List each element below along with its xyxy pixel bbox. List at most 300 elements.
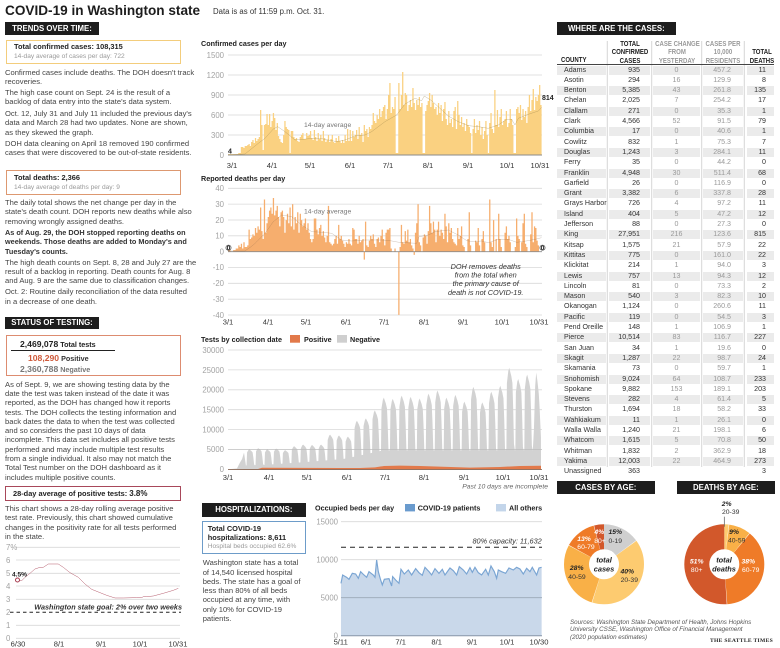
text: testing data explanation: performed and may include multiple test results: [5, 445, 164, 454]
heading: deaths by age: DEATHS BY AGE:: [693, 483, 759, 492]
text: weekend reporting note: As of Aug. 29, the DOH stopped reporting deaths on: [5, 228, 186, 237]
table rows: 106.9: [713, 323, 731, 331]
chart: tests by collection date: 5/1: [302, 473, 312, 482]
table rows: 11: [759, 66, 766, 74]
table rows: 0: [762, 158, 766, 166]
annotation: DOH removes deaths: from the total when: [455, 270, 517, 280]
table header: FROM: [668, 47, 686, 56]
chart: tests by collection date: 25000: [202, 366, 225, 375]
text: hospital capacity: beds. The state has a goal of: [203, 577, 300, 586]
heading: where are the cases: [557, 22, 676, 35]
heading: status of testing: [5, 317, 99, 329]
table rows: 40.6: [717, 127, 731, 135]
text: daily total note: [5, 198, 192, 226]
table rows: 3: [762, 313, 766, 321]
table rows: 1,240: [622, 426, 640, 434]
table rows: 1: [762, 364, 766, 372]
chart: occupied beds per day: 5/11: [334, 638, 348, 646]
text: hospital capacity: [202, 558, 300, 623]
chart: reported deaths per day: Reported deaths per day: [201, 174, 285, 183]
stat: 28-day average: 28-day average of positive tests: 3.8%: [13, 489, 147, 498]
table rows: Ferry: [564, 158, 581, 166]
chart: confirmed cases per day: 3/1: [227, 161, 237, 170]
table rows: 22: [758, 241, 766, 249]
table rows: 148: [628, 323, 640, 331]
table rows: 50: [758, 436, 766, 444]
table rows: 22: [673, 457, 680, 465]
chart: confirmed cases per day: 9/1: [463, 161, 473, 170]
annotation: DOH removes deaths: DOH removes deaths: [451, 262, 521, 271]
table header: TOTAL: [752, 47, 771, 56]
heading: deaths by age: [677, 481, 775, 494]
table rows: 233: [754, 374, 766, 382]
chart: reported deaths per day: [201, 174, 549, 326]
line: 80% capacity: 80% capacity: 11,632: [472, 537, 542, 546]
table rows: 16: [673, 76, 680, 84]
text: updates note: as they skewed the graph.: [5, 128, 94, 137]
text: sources: [570, 618, 752, 641]
table rows: 129.9: [713, 76, 731, 84]
table rows: 189.1: [713, 385, 731, 393]
table rows: 832: [628, 138, 640, 146]
chart: occupied beds per day: 9/1: [467, 638, 477, 646]
table rows: 22: [758, 251, 766, 259]
chart: cases by age donut: 4%: [593, 529, 604, 536]
table rows: 1,243: [622, 148, 640, 156]
table rows: 227: [754, 333, 766, 341]
chart: tests by collection date: 10/1: [496, 473, 510, 482]
table rows: Mason: [564, 292, 585, 300]
chart: cases by age donut: 40%: [619, 568, 634, 576]
table rows: Skagit: [564, 354, 584, 362]
table rows: 35.3: [717, 107, 731, 115]
chart: reported deaths per day: 30: [215, 200, 225, 209]
text: weekend reporting note: Tuesday's counts.: [5, 247, 68, 256]
table rows: 0: [675, 179, 678, 187]
chart: deaths by age donut: total: [716, 556, 733, 564]
panel: status of testing: [5, 317, 181, 541]
table rows: 21: [673, 241, 680, 249]
table header: [557, 39, 774, 65]
table rows: 10,514: [618, 333, 640, 341]
chart: confirmed cases per day: 10/31: [530, 161, 550, 170]
legend: positive: [290, 335, 332, 344]
table rows: 21: [673, 426, 680, 434]
text: testing data explanation: from a single individual. It also may not match the: [5, 454, 171, 463]
table rows: 8: [762, 76, 766, 84]
table rows: Spokane: [564, 385, 592, 393]
table rows: 4,566: [622, 117, 640, 125]
table rows: 9,024: [622, 374, 640, 382]
legend: COVID-19 patients: COVID-19 patients: [418, 504, 480, 512]
table rows: 757: [628, 272, 640, 280]
chart: 28-day average of positive tests: 5: [6, 569, 11, 578]
table rows: 0: [675, 251, 678, 259]
table header: RESIDENTS: [705, 56, 740, 65]
text: hospital capacity: of 14,540 licensed hospital: [203, 568, 293, 577]
chart: occupied beds per day: 15000: [316, 518, 339, 527]
callout: total confirmed cases: [6, 40, 180, 64]
text: reconciliation note: Oct. 2: Routine daily reconciliation of the data resulted: [5, 287, 187, 296]
heading: where are the cases: WHERE ARE THE CASES:: [568, 24, 665, 33]
chart: confirmed cases per day: 5/1: [305, 161, 315, 170]
chart: occupied beds per day: 0: [334, 632, 339, 641]
table rows: 362.9: [713, 447, 731, 455]
table rows: Franklin: [564, 169, 589, 177]
text: confirmed cases note: Confirmed cases include deaths. The DOH doesn't track: [5, 68, 194, 77]
text: hospital capacity: only 10% for COVID-19: [203, 605, 282, 614]
table rows: 18: [673, 405, 680, 413]
text: testing data explanation: Total Test number on the DOH dashboard as it: [5, 463, 161, 472]
chart: occupied beds per day: 7/1: [395, 638, 406, 646]
chart: cases by age donut: total: [596, 556, 613, 564]
chart: confirmed cases per day: 10/1: [500, 161, 514, 170]
chart: deaths by age donut: deaths: [712, 564, 736, 574]
chart: tests by collection date: 9/1: [459, 473, 469, 482]
chart: reported deaths per day: 5/1: [301, 318, 311, 326]
table rows: Clark: [564, 117, 581, 125]
table rows: Pacific: [564, 313, 585, 321]
chart: reported deaths per day: 0: [227, 245, 231, 252]
table rows: Kitsap: [564, 241, 584, 249]
table rows: 58.2: [717, 405, 731, 413]
table rows: 726: [628, 199, 640, 207]
text: testing data explanation: tests. The DOH collects the testing information and: [5, 408, 176, 417]
chart: tests by collection date: 20000: [202, 386, 225, 394]
chart: reported deaths per day: 9/1: [458, 318, 468, 326]
chart: reported deaths per day: 3/1: [223, 318, 233, 326]
chart: 28-day average of positive tests: 7%: [6, 543, 17, 552]
annotation: DOH removes deaths: the primary cause of: [453, 279, 520, 288]
chart: reported deaths per day: -40: [213, 311, 225, 320]
table header: COUNTY: [561, 55, 587, 64]
table rows: Asotin: [564, 76, 584, 84]
table rows: 119: [629, 313, 640, 321]
heading: hospitalizations: HOSPITALIZATIONS:: [215, 505, 292, 514]
chart: confirmed cases per day: 1200: [207, 71, 225, 80]
table rows: 0: [675, 107, 678, 115]
table rows: 404: [628, 210, 640, 218]
chart: reported deaths per day: 20: [215, 216, 225, 225]
chart: tests by collection date: 4/1: [264, 473, 274, 482]
chart: cases by age donut: 80+: [594, 538, 606, 545]
table rows: 83: [673, 333, 680, 341]
table rows: 13: [673, 272, 680, 280]
table rows: Island: [564, 210, 583, 218]
legend: all others: All others: [509, 504, 542, 512]
heading: hospitalizations: [202, 503, 306, 517]
table: cases by county: [557, 39, 774, 65]
chart: confirmed cases per day: 6/1: [345, 161, 355, 170]
callout: total deaths: [6, 170, 180, 194]
table rows: 3: [762, 467, 766, 475]
table rows: 7: [675, 96, 678, 104]
subtitle: data date: Data is as of 11:59 p.m. Oct. 31.: [213, 7, 324, 16]
chart: tests by collection date: 0: [220, 465, 225, 474]
table rows: 12: [758, 210, 766, 218]
table rows: 88: [632, 220, 640, 228]
text: sources: University CSSE, Washington Office of Financial Management: [570, 626, 743, 633]
table header: CASES PER: [705, 39, 740, 48]
table rows: 1,575: [622, 241, 640, 249]
table rows: 1: [675, 344, 678, 352]
table rows: 1: [762, 127, 766, 135]
table rows: 24: [758, 354, 766, 362]
chart: confirmed cases per day: 814: [542, 95, 554, 102]
chart: confirmed cases per day: 14-day average: [304, 122, 351, 129]
chart: reported deaths per day: -20: [213, 279, 225, 288]
chart: confirmed cases per day: 900: [211, 91, 225, 100]
text: 28-day rate explanation: changes in the positivity rate for all tests performed: [5, 523, 176, 532]
text: 28-day rate explanation: in the state.: [5, 532, 44, 541]
callout: 28-day average of positive tests: [5, 486, 180, 501]
table rows: 1: [675, 416, 678, 424]
series: negative tests base: [243, 450, 541, 469]
table rows: Lincoln: [564, 282, 586, 290]
table rows: 30: [673, 169, 680, 177]
text: testing data explanation: reported, as the DOH has changed how it reports: [5, 398, 170, 407]
table rows: 116.9: [714, 179, 731, 187]
chart: tests by collection date: 5000: [207, 445, 225, 454]
table rows: 75.3: [717, 138, 731, 146]
text: hospital capacity: less than 80% of all beds: [203, 586, 287, 595]
chart: occupied beds per day: [315, 504, 549, 646]
table rows: 216: [671, 230, 682, 238]
table rows: 11: [633, 416, 640, 424]
text: testing data explanation: As of Sept. 9, we are showing testing data by the: [5, 380, 170, 389]
chart: 28-day average of positive tests: 3: [6, 595, 10, 604]
chart: tests by collection date: 6/1: [342, 473, 352, 482]
stat: positive tests: 108,290 Positive: [28, 353, 89, 363]
table rows: 28: [758, 189, 766, 197]
table rows: 7: [762, 138, 766, 146]
table rows: 254.2: [713, 96, 731, 104]
chart: deaths by age donut: 20-39: [722, 509, 740, 516]
table rows: 57.9: [717, 241, 731, 249]
table rows: 17: [758, 96, 766, 104]
chart: occupied beds per day: 10000: [316, 556, 339, 565]
text: hospital capacity: patients.: [203, 614, 231, 623]
table rows: 91.5: [717, 117, 731, 125]
table rows: 44.2: [717, 158, 731, 166]
text: data cleaning note: [5, 139, 192, 157]
text: testing data explanation: back dates the data to when the test was collected: [5, 417, 175, 426]
table rows: Whatcom: [564, 436, 594, 444]
table rows: 5: [675, 436, 678, 444]
table rows: Benton: [564, 86, 586, 94]
table rows: 3: [675, 292, 678, 300]
chart: occupied beds per day: 10/30: [529, 638, 549, 646]
stat: confirmed cases: Total confirmed cases: 108,315: [14, 42, 123, 51]
chart: confirmed cases per day: [201, 39, 554, 170]
table rows: 94.3: [717, 272, 731, 280]
table rows: 10: [758, 292, 766, 300]
text: confirmed cases note: [5, 68, 194, 86]
chart: deaths by age donut: 80+: [691, 567, 702, 574]
table rows: Jefferson: [564, 220, 593, 228]
chart: tests by collection date: 10/31: [529, 473, 549, 482]
chart: cases by age donut: 28%: [569, 565, 584, 572]
table rows: 19.6: [717, 344, 731, 352]
table rows: Douglas: [564, 148, 590, 156]
table rows: 35: [632, 158, 640, 166]
chart: tests by collection date: 10000: [202, 426, 225, 434]
heading: trends over time: TRENDS OVER TIME:: [12, 24, 92, 33]
table rows: 0: [762, 220, 766, 228]
panel: hospitalizations: [202, 503, 306, 623]
legend: negative: [337, 335, 380, 344]
stat: total hospitalizations: hospitalizations: 8,611: [208, 533, 286, 542]
table rows: 260.6: [713, 302, 731, 310]
heading: cases by age: CASES BY AGE:: [575, 483, 636, 492]
text: 28-day rate explanation: test rate. Previously, this chart showed cumulative: [5, 513, 173, 522]
table rows: 1: [762, 107, 766, 115]
table rows: 0: [675, 302, 678, 310]
table rows: 457.2: [713, 66, 731, 74]
stat: hospital beds occupied: Hospital beds occupied 62.6%: [208, 543, 296, 550]
text: updates note: data and March 28 had two updates. None are shown,: [5, 118, 188, 127]
table rows: 26: [632, 179, 640, 187]
text: sources: (2020 population estimates): [570, 634, 647, 641]
text: weekend reporting note: [5, 228, 187, 256]
table rows: 6: [675, 189, 678, 197]
table rows: 54.5: [717, 313, 731, 321]
table rows: 282: [628, 395, 640, 403]
table rows: 0: [675, 220, 678, 228]
table header: CASE CHANGE: [655, 39, 699, 48]
table rows: Okanogan: [564, 302, 597, 310]
chart: cases by age donut: 40-59: [568, 574, 586, 581]
table header: YESTERDAY: [659, 56, 695, 65]
stat: total hospitalizations: Total COVID-19: [208, 524, 261, 533]
table rows: 0: [762, 344, 766, 352]
table rows: Cowlitz: [564, 138, 587, 146]
stat: total deaths: Total deaths: 2,366: [14, 173, 80, 182]
chart: tests by collection date: 7/1: [380, 473, 390, 482]
table rows: 273: [754, 457, 766, 465]
chart: occupied beds per day: 6/1: [361, 638, 371, 646]
title: COVID-19 in Washington state: [5, 3, 200, 18]
chart: reported deaths per day: 4/1: [263, 318, 273, 326]
table rows: 153: [671, 385, 682, 393]
table rows: 540: [628, 292, 640, 300]
table rows: Whitman: [564, 447, 592, 455]
chart: 28-day average of positive tests: 4: [6, 582, 11, 591]
line: 14-day average of cases: [228, 96, 542, 155]
text: high case count note: [5, 88, 172, 106]
table grid lines: [607, 41, 744, 476]
text: high death count note: The high death counts on Sept. 8, 28 and July 27 are the: [5, 258, 196, 267]
table rows: 1: [675, 323, 678, 331]
callout: total tests: [6, 335, 180, 376]
text: updates note: Oct. 12, July 31 and July 11 included the previous day's: [5, 109, 192, 118]
table rows: 61.4: [717, 395, 731, 403]
table rows: 12,003: [618, 457, 640, 465]
text: weekend reporting note: weekends. Those deaths are added to Monday's and: [5, 237, 187, 246]
table rows: 775: [628, 251, 640, 259]
table rows: Walla Walla: [564, 426, 601, 434]
table rows: 17: [632, 127, 640, 135]
table rows: 5: [675, 210, 678, 218]
table rows: 337.8: [713, 189, 731, 197]
stat: average deaths: 14-day average of deaths per day: 9: [14, 184, 120, 190]
chart: deaths by age donut: 38%: [741, 558, 755, 566]
table rows: 261.8: [713, 86, 731, 94]
table rows: 97.2: [717, 199, 731, 207]
table rows: 43: [673, 86, 680, 94]
table rows: Unassigned: [564, 467, 601, 475]
stat: total tests: 2,469,078 Total tests: [20, 339, 96, 349]
table rows: 511.4: [714, 169, 731, 177]
heading: trends over time: [5, 22, 99, 35]
table rows: Thurston: [564, 405, 592, 413]
chart: tests by collection date: Tests by collection date: [201, 335, 282, 344]
chart: cases by age donut: 20-39: [621, 577, 638, 584]
table rows: [557, 66, 774, 476]
divider: total tests rule: [11, 349, 115, 352]
chart: confirmed cases per day: Confirmed cases per day: [201, 39, 286, 48]
table rows: 27,951: [618, 230, 640, 238]
table rows: 3: [762, 261, 766, 269]
table rows: 294: [628, 76, 640, 84]
chart: 28-day average of positive tests: 4.5%: [12, 572, 27, 579]
table rows: 214: [628, 261, 640, 269]
chart: occupied beds per day: Occupied beds per day: [315, 504, 394, 512]
chart: tests by collection date: 15000: [202, 406, 225, 414]
table rows: Adams: [564, 66, 586, 74]
text: testing data explanation: date the test was taken instead of the date it was: [5, 389, 169, 398]
table rows: 2,025: [622, 96, 640, 104]
chart: confirmed cases per day: 7/1: [383, 161, 393, 170]
chart: reported deaths per day: 14-day average: [304, 208, 351, 216]
table rows: San Juan: [564, 344, 594, 352]
chart: deaths by age donut: [690, 501, 760, 592]
text: high case count note: backlog of data entry into the state's data system.: [5, 97, 172, 106]
table rows: 0: [675, 127, 678, 135]
table rows: 203: [754, 385, 766, 393]
chart: deaths by age donut: 40-59: [728, 538, 746, 544]
chart: occupied beds per day: 10/1: [500, 638, 514, 646]
table header: TOTAL: [620, 39, 640, 48]
table rows: 73.3: [717, 282, 731, 290]
table rows: 79: [758, 117, 766, 125]
table rows: 26.1: [717, 416, 731, 424]
table rows: 11: [759, 199, 766, 207]
table rows: 3,382: [622, 189, 640, 197]
table rows: Pierce: [564, 333, 584, 341]
text: confirmed cases note: recoveries.: [5, 77, 42, 86]
table rows: 1: [675, 138, 678, 146]
table rows: Grays Harbor: [564, 199, 607, 207]
text: daily total note: state's death count. DOH reports new deaths while also: [5, 207, 192, 216]
chart: 28-day average of positive tests: 0: [6, 634, 11, 643]
text: testing data explanation: and so considers the past 10 days of data: [5, 426, 146, 435]
table rows: 0: [675, 158, 678, 166]
table rows: 0: [675, 282, 678, 290]
table rows: Garfield: [564, 179, 589, 187]
table rows: Columbia: [564, 127, 594, 135]
chart: cases by age donut: 0-19: [608, 538, 622, 545]
table rows: 108.7: [713, 374, 731, 382]
table rows: 59.7: [717, 364, 731, 372]
chart: occupied beds per day: 5000: [321, 594, 339, 603]
text: high death count note: [5, 258, 196, 285]
text: hospital capacity: occupied at any time, with: [203, 595, 290, 604]
text: reconciliation note: in a decrease of one death.: [5, 297, 97, 306]
table rows: 11: [759, 302, 766, 310]
table rows: 161.0: [713, 251, 731, 259]
table rows: 363: [628, 467, 640, 475]
